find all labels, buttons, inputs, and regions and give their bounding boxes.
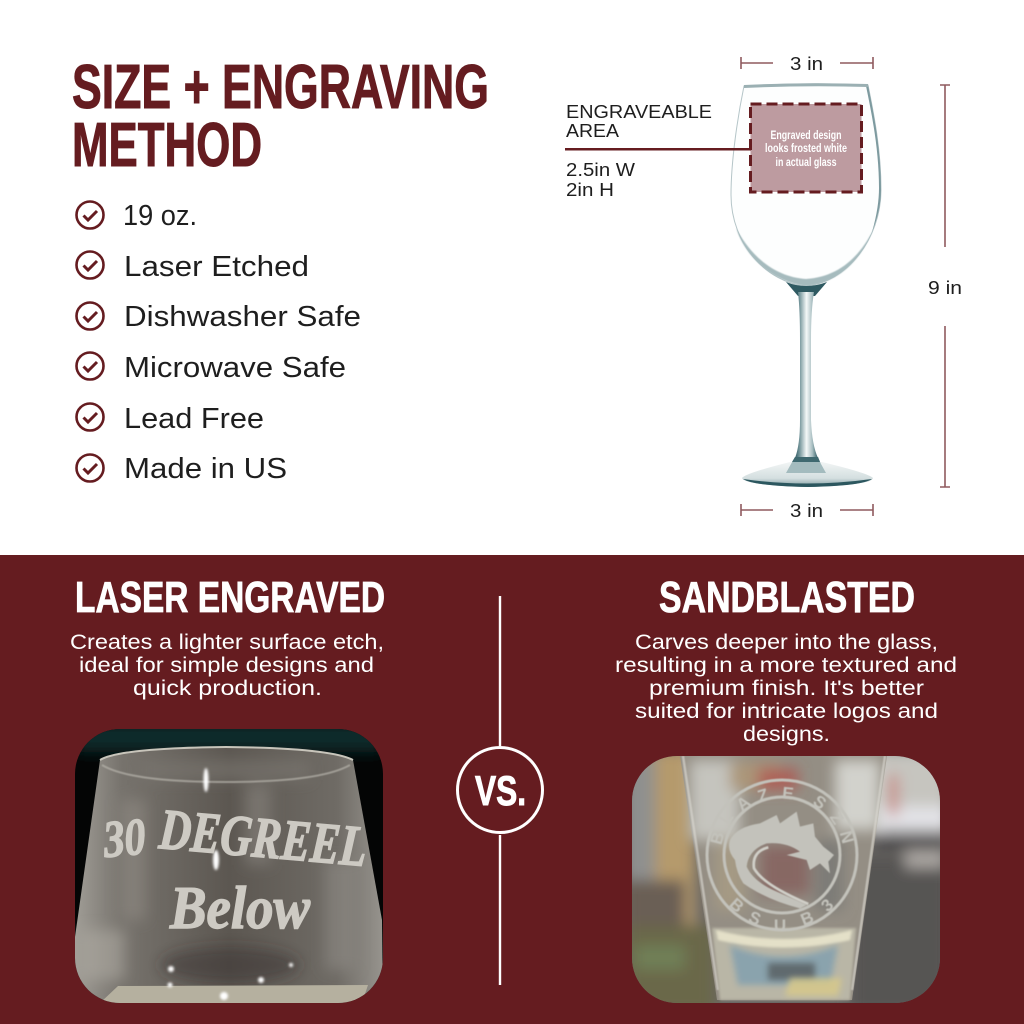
text: sandblasted description: designs. (743, 723, 830, 746)
etched emblem: S (746, 907, 764, 929)
engraveable area callout: AREA (566, 120, 620, 141)
panel: comparison (0, 555, 1024, 1024)
bowl (731, 84, 881, 286)
engraved text on glass: DEGREEL (156, 796, 370, 879)
text: sandblasted description: premium finish. It's better (649, 677, 924, 700)
text: sandblasted description: Carves deeper into the glass, (635, 631, 938, 654)
heading: laser engraved: LASER ENGRAVED (75, 573, 385, 622)
item: 19 oz. (76, 200, 197, 232)
dimension: height 9 in (928, 85, 962, 487)
heading: sandblasted: SANDBLASTED (659, 573, 915, 622)
etched emblem: Z (755, 785, 771, 806)
dimension: height 9 in: 9 in (928, 277, 962, 298)
etched emblem: Z (826, 809, 847, 828)
box caption (765, 130, 847, 169)
item: Made in US: Made in US (124, 453, 287, 485)
feature checklist (76, 200, 361, 485)
item: Microwave Safe: Microwave Safe (124, 352, 346, 384)
engraved text on glass: 30 (100, 809, 148, 869)
item: Lead Free: Lead Free (124, 403, 264, 435)
engraveable area callout: ENGRAVEABLE (566, 101, 712, 122)
title: METHOD (72, 111, 262, 180)
engraveable area callout (565, 101, 751, 200)
text: laser description (70, 631, 384, 700)
etched emblem: N (836, 829, 857, 846)
wine glass illustration (731, 83, 881, 487)
etched emblem: A (733, 792, 754, 815)
box caption: Engraved design (770, 130, 842, 142)
etched emblem: B (726, 894, 748, 917)
dimension: base width 3 in: 3 in (790, 500, 823, 521)
text: sandblasted description (615, 631, 957, 746)
text: sandblasted description: suited for intricate logos and (635, 700, 938, 723)
etched emblem: U (774, 916, 786, 935)
divider with VS badge: VS. (475, 767, 526, 814)
stem (795, 292, 818, 458)
engraveable area box (750, 104, 862, 192)
etched emblem: B (707, 830, 728, 847)
engraved text on glass: Below (169, 875, 311, 941)
engraveable area callout: 2.5in W (566, 159, 636, 180)
title (72, 53, 489, 180)
divider with VS badge (458, 596, 542, 985)
title: SIZE + ENGRAVING (72, 53, 489, 122)
etched emblem: 3 (817, 895, 837, 916)
item: Laser Etched: Laser Etched (124, 251, 309, 283)
photo: laser engraved glass (75, 722, 383, 1003)
shot glass base (712, 928, 856, 1000)
etched emblem: L (716, 809, 737, 828)
item: Dishwasher Safe: Dishwasher Safe (124, 301, 361, 333)
dimension: top width 3 in: 3 in (790, 53, 823, 74)
foot (742, 462, 873, 487)
etched emblem: S (810, 791, 830, 813)
dragon (729, 812, 834, 908)
photo: sandblasted shot glass (632, 756, 940, 1003)
shot glass body (680, 756, 887, 1000)
etched emblem: E (781, 783, 795, 804)
etched emblem: B (798, 907, 816, 930)
text: laser description: Creates a lighter surface etch, (70, 631, 384, 654)
box caption: in actual glass (776, 157, 836, 169)
glass edges (683, 756, 885, 990)
dimension: top width 3 in (741, 53, 873, 74)
text: sandblasted description: resulting in a more textured and (615, 654, 957, 677)
engraved text on glass (104, 810, 365, 930)
item: 19 oz.: 19 oz. (123, 200, 197, 232)
box caption: looks frosted white (765, 143, 847, 155)
engraveable area callout: 2in H (566, 179, 614, 200)
dimension: base width 3 in (741, 500, 873, 521)
text: laser description: quick production. (133, 677, 322, 700)
text: laser description: ideal for simple designs and (79, 654, 374, 677)
etched emblem (707, 780, 857, 935)
